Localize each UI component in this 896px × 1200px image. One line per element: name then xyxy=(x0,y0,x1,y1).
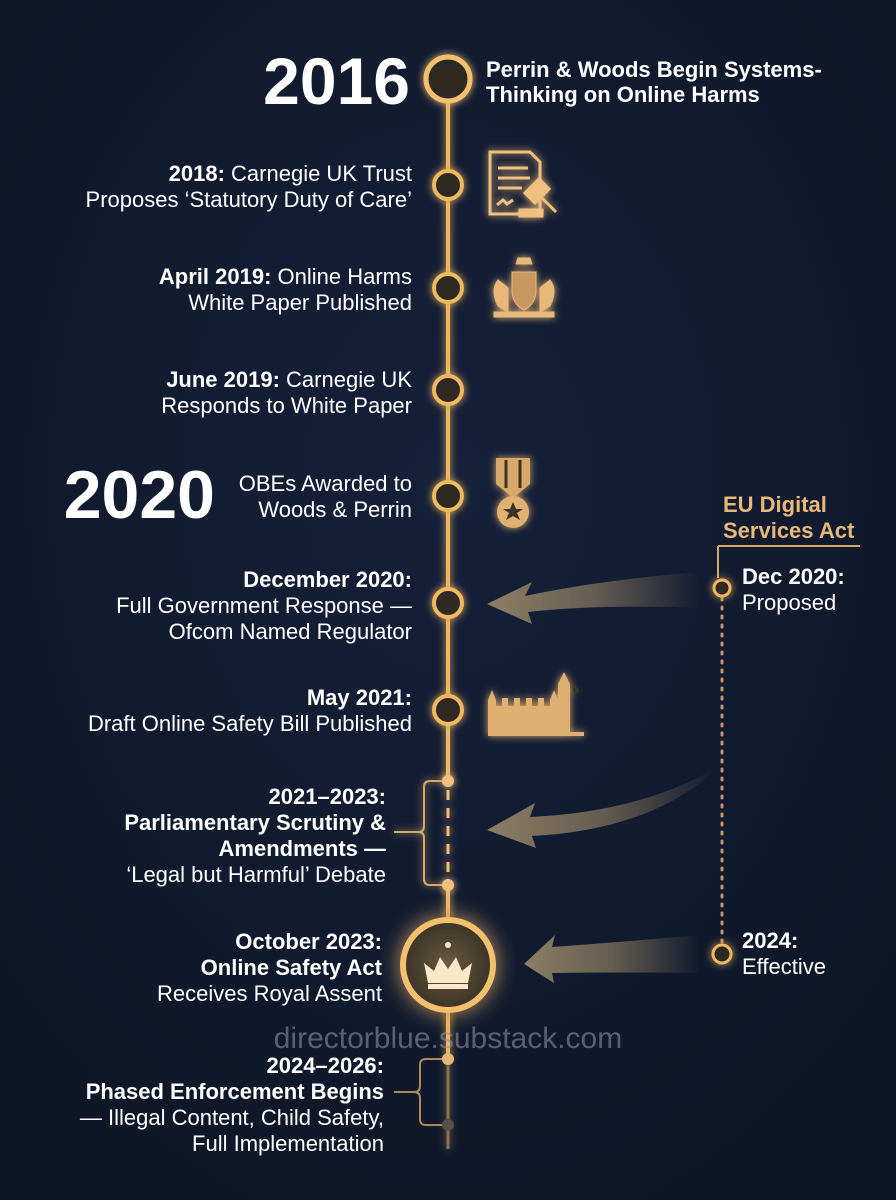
icon: document and gavel xyxy=(490,152,556,216)
text 2024-2026 xyxy=(80,1053,384,1156)
arrow: Dec 2020 xyxy=(487,572,700,624)
arrow: scrutiny xyxy=(487,768,716,848)
bracket 2024-2026 xyxy=(394,1053,454,1131)
text 2021-2023: Amendments — xyxy=(219,836,386,861)
node: royal assent crown xyxy=(403,920,493,1010)
text June 2019 xyxy=(161,367,412,418)
text: Perrin & Woods: Thinking on Online Harms xyxy=(486,82,760,107)
node 2016 xyxy=(426,57,470,101)
EU text 2024: Effective xyxy=(742,954,826,979)
text December 2020: Full Government Response — xyxy=(116,593,412,618)
text October 2023: Receives Royal Assent xyxy=(157,981,382,1006)
heading 2016: 2016 xyxy=(263,44,410,118)
text May 2021: Draft Online Safety Bill Published xyxy=(88,711,412,736)
watermark: directorblue.substack.com xyxy=(274,1022,622,1055)
bracket 2021-2023 xyxy=(394,775,454,891)
EU text Dec 2020: Proposed xyxy=(742,590,836,615)
text December 2020: December 2020: xyxy=(243,567,412,592)
text December 2020 xyxy=(116,567,412,644)
text 2024-2026: Full Implementation xyxy=(192,1131,384,1156)
node 2020 xyxy=(434,482,462,510)
text 2018: 2018: Carnegie UK Trust xyxy=(169,161,412,186)
text October 2023: October 2023: xyxy=(235,929,382,954)
EU node Dec 2020 xyxy=(714,580,730,596)
text 2018: Proposes ‘Statutory Duty of Care’ xyxy=(86,187,412,212)
EU text Dec 2020 xyxy=(742,564,845,615)
text 2021-2023: 2021–2023: xyxy=(269,784,386,809)
node 2018 xyxy=(434,171,462,199)
arrow: 2024 xyxy=(524,935,700,983)
icon: medal xyxy=(496,458,530,528)
text April 2019 xyxy=(159,264,412,315)
icon: parliament xyxy=(488,672,584,736)
text 2021-2023 xyxy=(124,784,386,887)
text December 2020: Ofcom Named Regulator xyxy=(169,619,412,644)
text April 2019: April 2019: Online Harms xyxy=(159,264,412,289)
EU node 2024 xyxy=(713,945,731,963)
text 2018 xyxy=(86,161,412,212)
text: Perrin & Woods: Perrin & Woods Begin Systems- xyxy=(486,57,822,82)
icon: coat of arms xyxy=(494,258,554,317)
EU text Dec 2020: Dec 2020: xyxy=(742,564,845,589)
heading 2020: 2020 xyxy=(64,457,215,533)
EU DSA heading: Services Act xyxy=(723,518,855,543)
text April 2019: White Paper Published xyxy=(188,290,412,315)
text OBEs: Woods & Perrin xyxy=(258,497,412,522)
EU DSA heading xyxy=(718,492,860,578)
text 2021-2023: ‘Legal but Harmful’ Debate xyxy=(126,862,386,887)
text OBEs: OBEs Awarded to xyxy=(239,471,412,496)
timeline spine xyxy=(446,100,450,1149)
text October 2023 xyxy=(157,929,383,1006)
text 2024-2026: 2024–2026: xyxy=(267,1053,384,1078)
text May 2021: May 2021: xyxy=(307,685,412,710)
text June 2019: June 2019: Carnegie UK xyxy=(166,367,412,392)
text June 2019: Responds to White Paper xyxy=(161,393,412,418)
text 2021-2023: Parliamentary Scrutiny & xyxy=(124,810,386,835)
text 2024-2026: — Illegal Content, Child Safety, xyxy=(80,1105,384,1130)
text OBEs xyxy=(239,471,412,522)
text 2024-2026: Phased Enforcement Begins xyxy=(86,1079,384,1104)
node April 2019 xyxy=(434,274,462,302)
node June 2019 xyxy=(434,376,462,404)
EU dotted line xyxy=(720,598,724,942)
text October 2023: Online Safety Act xyxy=(201,955,383,980)
EU DSA heading: EU Digital xyxy=(723,492,827,517)
node May 2021 xyxy=(434,696,462,724)
text: Perrin & Woods xyxy=(486,57,822,107)
EU text 2024 xyxy=(742,928,826,979)
node December 2020 xyxy=(434,589,462,617)
text May 2021 xyxy=(88,685,412,736)
EU text 2024: 2024: xyxy=(742,928,798,953)
